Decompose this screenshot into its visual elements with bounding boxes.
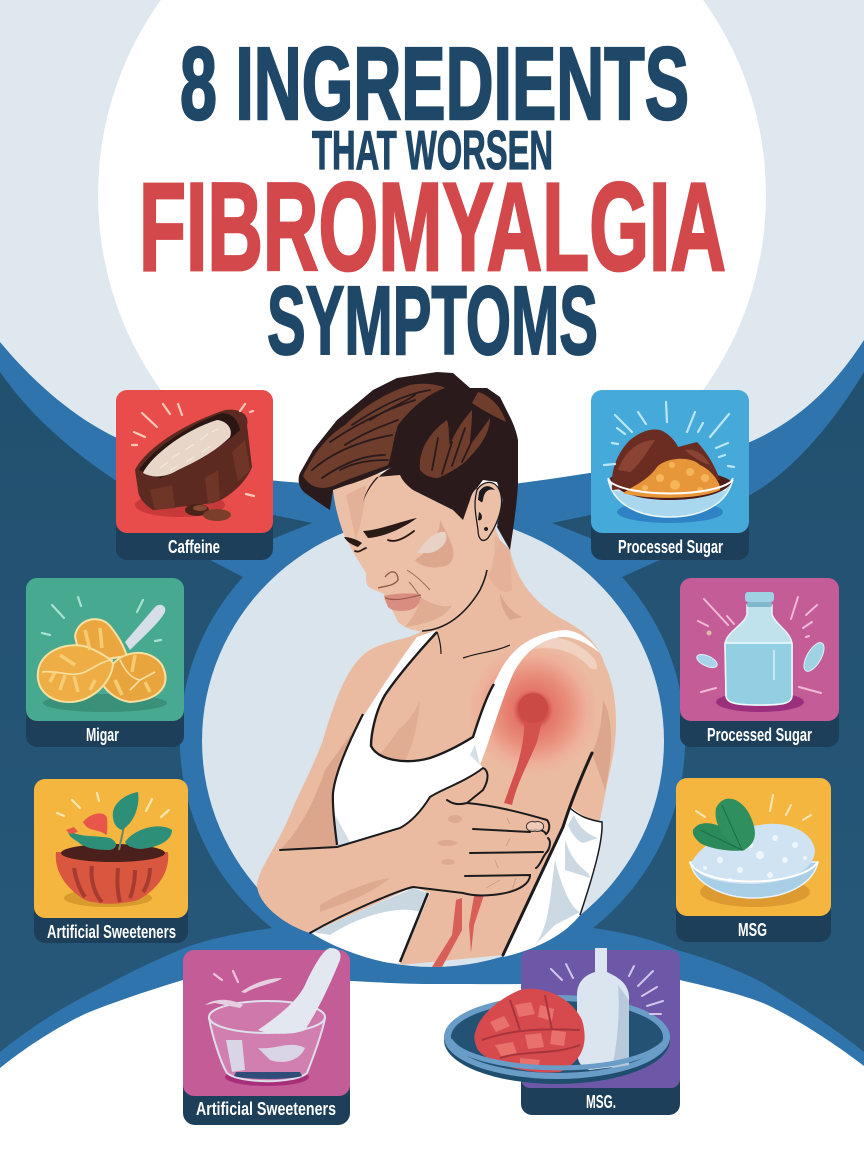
forearm and hand [257, 768, 550, 933]
card background [116, 390, 273, 533]
icon: bowl of sugar [604, 402, 734, 523]
hair highlights [303, 384, 506, 488]
card background [676, 778, 831, 916]
label: MSG: MSG [738, 920, 767, 940]
card: Migar [26, 578, 184, 747]
icon: orange slices and spoon [38, 597, 167, 712]
navy left panel [0, 372, 312, 1052]
label: Processed Sugar: Processed Sugar [618, 537, 723, 557]
label: Artificial Sweeteners: Artificial Sweeteners [47, 922, 176, 942]
pain streaks on arm [432, 895, 484, 967]
mouth [384, 593, 421, 611]
label: Processed Sugar: Processed Sugar [707, 725, 812, 745]
card background [34, 779, 188, 918]
title line: THAT WORSEN: THAT WORSEN [312, 119, 553, 181]
hair [299, 372, 518, 550]
nose [378, 572, 398, 588]
head [299, 372, 518, 631]
label: Caffeine: Caffeine [168, 537, 220, 557]
hair strands [312, 390, 478, 478]
label: MSG.: MSG. [586, 1092, 616, 1112]
pain area on shoulder [467, 644, 599, 776]
card background [591, 390, 749, 533]
jaw line [422, 570, 487, 631]
navy right panel [552, 372, 864, 1052]
icon: glass mortar and pestle [205, 948, 341, 1086]
right sleeve [503, 806, 602, 957]
card background [26, 578, 184, 721]
pain tail [504, 712, 543, 805]
card: Artificial Sweeteners (mortar) [183, 948, 350, 1125]
card background [183, 950, 350, 1096]
shoulder highlight [530, 637, 597, 670]
blue curved band [0, 340, 864, 1068]
card background [680, 578, 839, 721]
center circle [202, 515, 664, 967]
ear [475, 482, 502, 540]
card: Processed Sugar (bottle) [680, 578, 839, 747]
card: MSG. (meat plate) [444, 948, 680, 1115]
label: Artificial Sweeteners: Artificial Sweeteners [196, 1099, 336, 1119]
icon: plant in bowl [56, 792, 172, 907]
label: Migar: Migar [86, 725, 119, 745]
title line: SYMPTOMS: SYMPTOMS [267, 266, 598, 375]
card: Caffeine [116, 390, 273, 560]
label band [116, 505, 273, 560]
icon: chocolate with rays [132, 404, 254, 521]
fingernails [526, 822, 544, 832]
icon: plate with meat and bottle [444, 948, 670, 1084]
card: Artificial Sweeteners (plant) [34, 779, 188, 943]
lower shirt [310, 887, 430, 963]
person in pain [257, 372, 616, 967]
brows and eyes [344, 518, 417, 547]
title [139, 26, 726, 375]
icon: bottle with pills [695, 592, 828, 712]
face shading [346, 485, 366, 540]
body silhouette [257, 540, 616, 965]
icon: salt bowl with leaves [690, 795, 818, 907]
body shading [280, 593, 611, 905]
upper arm outline [503, 753, 592, 955]
face [333, 470, 500, 631]
pain core [518, 693, 548, 723]
neck line and collar [437, 632, 510, 658]
card: Processed Sugar (brown) [591, 390, 749, 560]
card background [521, 950, 680, 1088]
card: MSG (salt) [676, 778, 831, 942]
tank top [333, 630, 600, 847]
